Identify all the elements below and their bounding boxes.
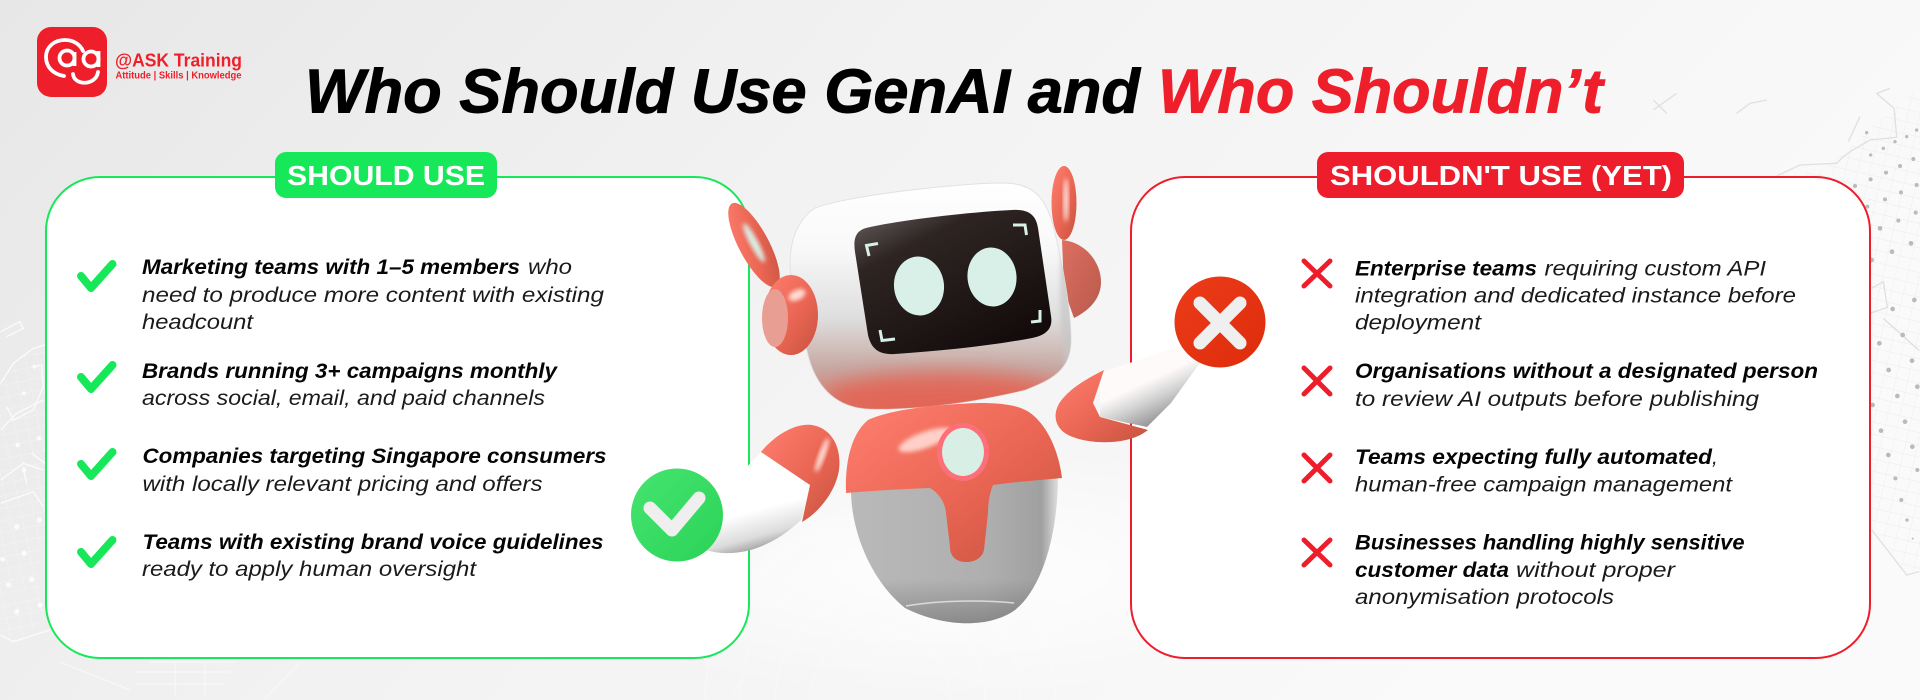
logo tagline: Attitude | Skills | Knowledge	[116, 70, 242, 82]
item: fully automated: ,	[1712, 446, 1718, 469]
robot body upper	[846, 403, 1062, 562]
title: Who Shouldn’t	[1158, 56, 1605, 126]
item: sensitive data	[1304, 532, 1745, 609]
robot arm: right	[1056, 343, 1202, 442]
robot eye: left	[891, 254, 947, 318]
robot screen corners	[866, 225, 1040, 340]
item: fully automated: Teams expecting fully automated	[1355, 446, 1713, 469]
item: organisations: Organisations without a designated person	[1355, 360, 1818, 383]
item: enterprise teams: requiring custom API	[1544, 258, 1766, 280]
badge: should use: SHOULD USE	[287, 160, 485, 191]
robot ear: right	[1062, 240, 1101, 318]
item: marketing teams	[81, 256, 604, 334]
item: enterprise teams: deployment	[1355, 312, 1482, 334]
item: fully automated: human-free campaign management	[1355, 474, 1733, 496]
logo	[37, 27, 242, 97]
badge: should use	[275, 152, 497, 198]
item: brands running campaigns	[81, 360, 558, 410]
item: marketing teams: who	[528, 256, 572, 279]
item: marketing teams: need to produce more content with existing	[142, 284, 604, 307]
robot screen	[854, 210, 1051, 354]
robot eye: right	[965, 245, 1019, 309]
item: companies targeting singapore: with locally relevant pricing and offers	[142, 473, 543, 496]
item: organisations: to review AI outputs before publishing	[1355, 388, 1759, 411]
item: sensitive data: customer data	[1355, 559, 1509, 582]
robot arm: left	[705, 425, 839, 553]
icon: red cross disc	[1174, 276, 1266, 368]
map: right side	[1653, 87, 1920, 575]
logo icon	[37, 27, 107, 97]
map: left side	[0, 322, 50, 642]
robot	[631, 166, 1266, 623]
item: marketing teams: Marketing teams with 1–5 members	[142, 256, 520, 279]
title	[305, 56, 1605, 126]
robot body lower	[851, 475, 1058, 623]
robot ear: left	[762, 275, 818, 355]
item: enterprise teams: integration and dedicated instance before	[1355, 284, 1796, 308]
item: sensitive data: anonymisation protocols	[1355, 586, 1615, 609]
item: organisations	[1304, 360, 1818, 411]
item: marketing teams: headcount	[142, 311, 254, 334]
item: brands running campaigns: across social, email, and paid channels	[142, 387, 546, 410]
logo wordmark: @ASK Training	[115, 50, 242, 70]
item: sensitive data: without proper	[1516, 559, 1676, 582]
item: enterprise teams	[1304, 258, 1796, 334]
item: fully automated	[1304, 446, 1733, 496]
item: companies targeting singapore	[81, 445, 606, 496]
item: teams with brand voice: Teams with existing brand voice guidelines	[142, 531, 604, 554]
panel: shouldn't use	[1131, 152, 1870, 658]
item: companies targeting singapore: Companies targeting Singapore consumers	[142, 445, 606, 468]
robot antenna: left	[719, 196, 789, 294]
item: enterprise teams: Enterprise teams	[1355, 258, 1537, 280]
icon: green check disc	[631, 468, 723, 562]
panel: should use	[46, 152, 749, 658]
robot antenna: right	[1052, 166, 1076, 240]
title: Who Should Use GenAI and	[305, 56, 1142, 126]
item: teams with brand voice: ready to apply human oversight	[142, 558, 477, 581]
robot chest light	[937, 423, 989, 481]
robot head	[790, 183, 1084, 424]
badge: shouldn't use	[1317, 152, 1684, 198]
item: brands running campaigns: Brands running 3+ campaigns monthly	[142, 360, 558, 383]
badge: shouldn't use: SHOULDN'T USE (YET)	[1330, 160, 1672, 191]
item: sensitive data: Businesses handling highly sensitive	[1355, 532, 1745, 554]
item: teams with brand voice	[81, 531, 604, 581]
